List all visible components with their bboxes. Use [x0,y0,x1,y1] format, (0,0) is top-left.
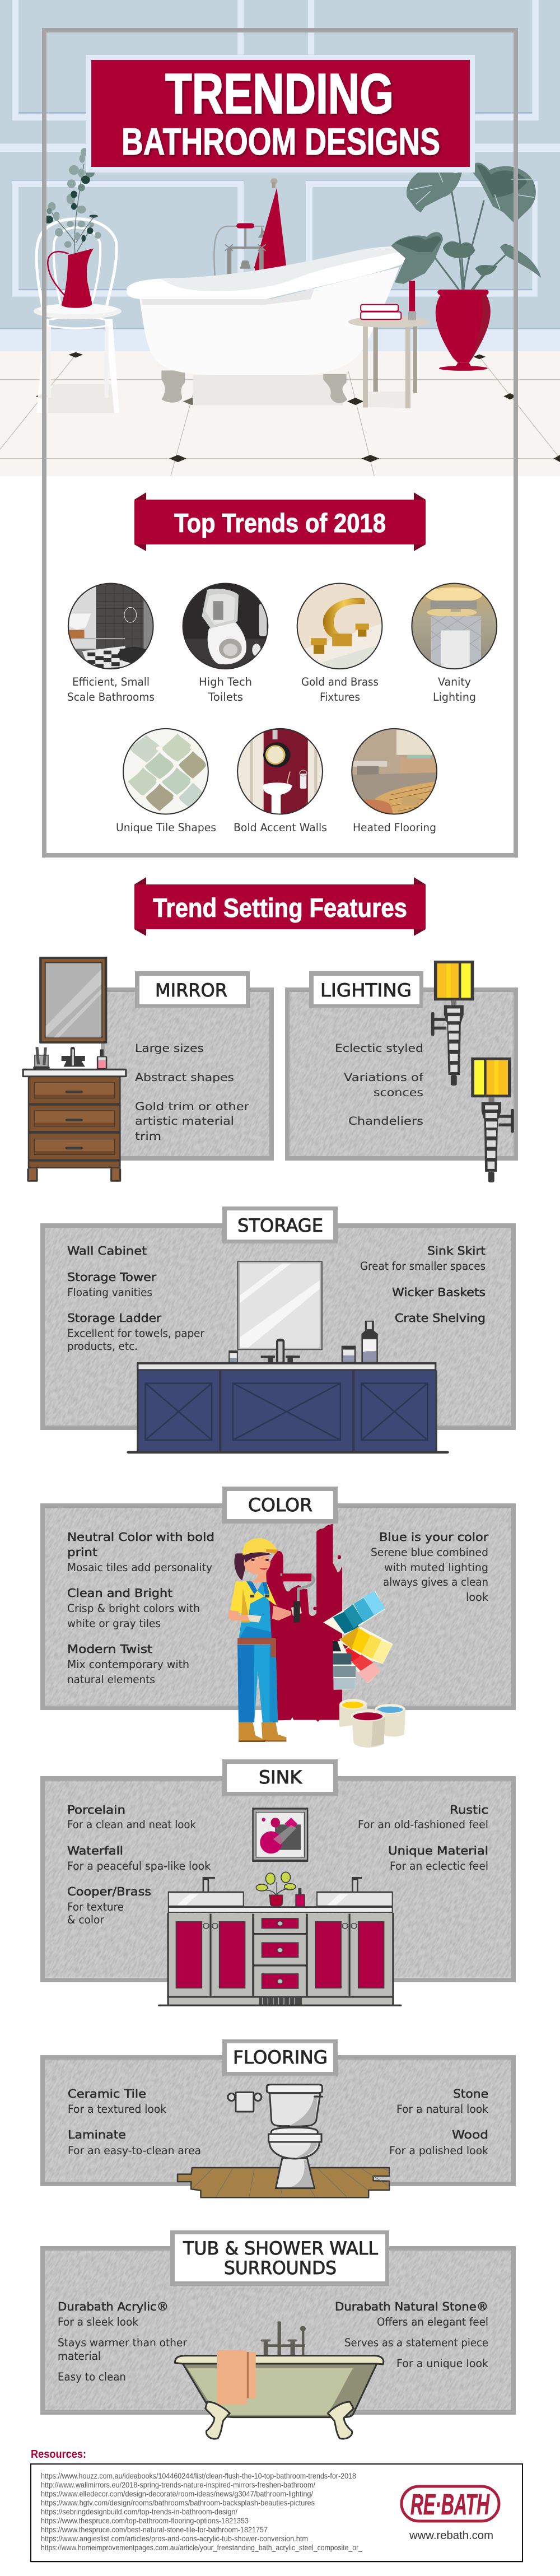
logo: Re-Bath: RE·BATH [410,2489,490,2521]
panel: color: white or gray tiles [67,1617,161,1630]
panel: lighting [285,971,518,1161]
panel: color: Crisp & bright colors with [67,1602,200,1615]
title: BATHROOM DESIGNS [122,120,440,163]
resources box with source links: https://www.hgtv.com/design/rooms/bathrooms/bathroom-backsplash-beauties-pictures [41,2499,315,2507]
panel: storage: Sink Skirt [427,1244,486,1257]
panel: storage: Storage Ladder [67,1311,162,1325]
panel: lighting: Chandeliers [348,1115,423,1128]
photo: vanity lighting [410,583,498,669]
panel: lighting: LIGHTING [320,980,412,1001]
panel: storage: Excellent for towels, paper [67,1327,205,1340]
panel: storage: Wicker Baskets [392,1285,486,1299]
icon: side table with books and candle [348,281,431,408]
panel: flooring: Laminate [68,2128,126,2141]
logo: Re-Bath [402,2486,499,2542]
panel: storage: Crate Shelving [395,1311,486,1325]
panel: flooring: For a textured look [68,2103,167,2116]
photo captions: Efficient, Small [72,676,150,688]
illustration: toilet on wood plank [178,2085,389,2197]
panel: storage: Floating vanities [67,1286,152,1299]
panel: sink: Unique Material [388,1844,488,1857]
panel: tub and shower wall surrounds: For a unique look [396,2357,489,2370]
panel: sink: & color [67,1913,105,1926]
panel: color: Mix contemporary with [67,1658,189,1671]
panel: color: natural elements [67,1673,155,1686]
panel: sink: For texture [67,1900,124,1913]
icon: monstera plant in red vase [391,162,541,371]
panel: tub and shower wall surrounds: material [58,2350,101,2363]
title: TRENDING [165,63,394,125]
photo: gold fixtures [296,583,382,669]
photo: high tech toilet [182,583,268,669]
panel: flooring: Stone [453,2087,488,2100]
panel: flooring: FLOORING [233,2047,328,2068]
panel: lighting: sconces [374,1086,423,1099]
panel: sink: For a peaceful spa-like look [67,1860,211,1872]
trend photos row and labels [67,583,498,834]
panel: color: Serene blue combined [371,1546,488,1559]
panel: mirror: Large sizes [135,1042,204,1055]
ribbon heading: trend setting features [134,877,426,936]
panel: sink: For an eclectic feel [390,1860,488,1872]
panel: mirror: trim [135,1130,161,1143]
photo captions: Fixtures [320,691,360,704]
photo captions: High Tech [199,676,252,688]
panel: color [40,1487,516,1710]
panel: sink: Porcelain [67,1803,125,1816]
photo captions: Bold Accent Walls [234,821,327,834]
panel: tub and shower wall surrounds: SURROUNDS [224,2257,337,2279]
panel: color: with muted lighting [384,1561,488,1574]
panel: mirror: Gold trim or other [135,1100,250,1113]
panel: tub and shower wall surrounds: For a sleek look [58,2316,139,2328]
panel: flooring: Wood [452,2128,488,2141]
panel: color: Neutral Color with bold [67,1530,214,1544]
photo captions: Vanity [438,676,471,688]
panel: flooring: Ceramic Tile [68,2087,146,2100]
panel: tub and shower wall surrounds: Durabath Acrylic® [58,2300,169,2313]
panel: storage [40,1207,516,1430]
panel: tub and shower wall surrounds: Stays warmer than other [58,2336,188,2349]
photo captions: Heated Flooring [353,821,436,834]
resources box with source links: https://sebringdesignbuild.com/top-trends-in-bathroom-design/ [41,2508,237,2516]
panel: flooring: For an easy-to-clean area [68,2144,201,2157]
panel: color: print [67,1545,97,1559]
icon: wall sconce mirrored [471,1058,514,1182]
illustration: green claw-foot tub [175,2321,384,2439]
panel: tub and shower wall surrounds: TUB & SHOWER WALL [183,2238,378,2259]
heading: resources: Resources: [31,2448,86,2461]
photo: heated flooring [352,729,437,814]
hero illustration: bathroom scene [0,0,560,476]
panel: tub and shower wall surrounds: Serves as a statement piece [344,2336,488,2349]
panel: storage: Wall Cabinet [67,1244,147,1257]
panel: color: Clean and Bright [67,1586,172,1600]
panel: color: Mosaic tiles add personality [67,1561,212,1574]
panel: sink: Cooper/Brass [67,1885,151,1898]
ribbon heading: trend setting features: Trend Setting Features [153,893,407,923]
ribbon heading: top trends [134,492,426,551]
decorative frame around hero and top trends [42,28,518,858]
illustration: painter with paint swatches and buckets [228,1524,405,1748]
resources box with source links [31,2464,523,2563]
panel: lighting: Eclectic styled [335,1042,423,1055]
panel: storage: products, etc. [67,1340,138,1353]
icon: tub faucet and towel [214,178,287,278]
panel: sink: Rustic [450,1803,488,1816]
icon: chair with pitcher and eucalyptus [34,148,122,413]
panel: tub and shower wall surrounds: Durabath Natural Stone® [335,2300,488,2313]
resources box with source links: https://www.angieslist.com/articles/pros-and-cons-acrylic-tub-shower-conversion.htm [41,2535,308,2543]
photo: small bathroom [68,583,498,814]
icon: navy vanity with mirror [127,1261,449,1454]
logo: Re-Bath: www.rebath.com [409,2530,493,2542]
panel: lighting: Variations of [344,1071,424,1084]
photo captions: Scale Bathrooms [67,691,155,704]
resources box with source links: https://www.thespruce.com/best-natural-stone-tile-for-bathroom-1821757 [41,2526,268,2534]
panel: tub and shower wall surrounds: Offers an elegant feel [377,2316,488,2328]
icon: wood vanity with mirror [22,957,127,1182]
panel: sink: Waterfall [67,1844,123,1857]
panel: flooring: For a polished look [389,2144,489,2157]
resources box with source links: https://www.houzz.com.au/ideabooks/104460244/list/clean-flush-the-10-top-bathroom-trends-for-2018 [41,2472,356,2480]
ribbon heading: top trends: Top Trends of 2018 [174,508,386,538]
panel: sink [40,1759,516,1982]
resources box with source links: https://www.thespruce.com/top-bathroom-flooring-options-1821353 [41,2517,249,2525]
photo captions: Unique Tile Shapes [116,821,216,834]
panel: mirror [101,971,274,1161]
icon: claw-foot bathtub [127,246,413,406]
resources box with source links: http://www.wallmirrors.eu/2018-spring-trends-nature-inspired-mirrors-freshen-bathroom/ [41,2481,315,2489]
paint buckets [339,1699,405,1748]
panel: flooring [40,2039,516,2186]
panel: storage: Storage Tower [67,1270,157,1284]
panel: mirror: MIRROR [155,980,227,1001]
illustration: wall art above double vanity [158,1808,402,2006]
photo: unique tiles [123,729,209,814]
panel: color: Modern Twist [67,1642,152,1656]
panel: tub and shower wall surrounds: Easy to clean [58,2370,126,2383]
icon: wall sconce [431,961,474,1086]
panel: color: always gives a clean [383,1576,488,1589]
panel: flooring: For a natural look [396,2103,489,2116]
panel: tub and shower wall surrounds [40,2230,516,2415]
photo captions [67,676,476,834]
photo captions: Toilets [208,691,243,704]
resources box with source links: https://www.homeimprovementpages.com.au/article/your_freestanding_bath_acrylic_steel_composite_or_ [41,2544,362,2552]
title [86,55,475,173]
panel: mirror: Abstract shapes [135,1071,234,1084]
panel: sink: For a clean and neat look [67,1818,197,1831]
paint swatch fan [323,1590,393,1690]
panel: color: COLOR [248,1494,312,1516]
panel: color: look [466,1591,489,1604]
panel: storage: STORAGE [237,1215,323,1236]
painter figure [228,1538,314,1742]
panel: sink: SINK [259,1767,302,1788]
panel: color: Blue is your color [379,1530,489,1544]
photo captions: Lighting [433,691,476,704]
photo: bold accent wall [237,729,323,814]
panel: storage: Great for smaller spaces [360,1260,486,1273]
panel: mirror: artistic material [135,1115,234,1128]
photo captions: Gold and Brass [301,676,379,688]
panel: sink: For an old-fashioned feel [358,1818,488,1831]
resources box with source links: https://www.elledecor.com/design-decorate/room-ideas/news/g3047/bathroom-lighting/ [41,2490,313,2498]
